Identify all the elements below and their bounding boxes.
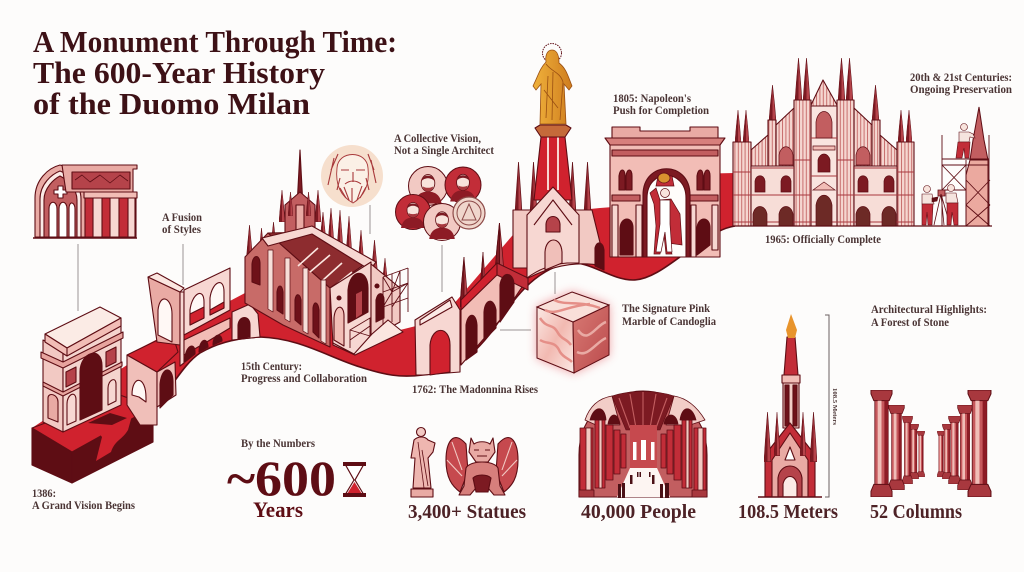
worker left [922, 186, 938, 225]
spire base line [758, 496, 822, 498]
nave floor [617, 468, 670, 497]
nave people [618, 472, 669, 498]
label: forest of stone [871, 302, 987, 329]
halo [542, 44, 562, 62]
central spire [285, 150, 315, 240]
scaffolding [350, 268, 408, 348]
label: 1386 [32, 486, 135, 512]
Napoleon figure [650, 173, 682, 254]
icon: statue [411, 428, 435, 497]
height measure [825, 315, 838, 497]
label: Napoleon: 1805: Napoleon's [613, 91, 691, 105]
orange statue [786, 314, 797, 338]
triumphal arch 1386 [41, 307, 123, 432]
label: 1386: A Grand Vision Begins [32, 498, 135, 512]
icon: columns [871, 390, 991, 497]
icon: hourglass [343, 462, 366, 497]
fusion of styles arcade [127, 268, 260, 425]
label: 1965: 1965: Officially Complete [765, 232, 882, 246]
label: forest of stone: Architectural Highlights: [871, 302, 987, 316]
label: 1386: 1386: [32, 486, 56, 500]
pedestal [535, 125, 571, 137]
front section [330, 262, 371, 355]
label: preservation: Ongoing Preservation [910, 82, 1012, 96]
label: marble [622, 301, 716, 328]
label: 15th century: Progress and Collaboration [241, 371, 367, 385]
icon: gothic window and colonnade [33, 165, 137, 238]
label: A Fusion of Styles: A Fusion [162, 210, 202, 224]
title: A Monument Through Time: [33, 25, 397, 59]
medal [453, 197, 485, 229]
scaffold and workers [922, 107, 990, 226]
facade windows and doors [753, 112, 896, 226]
Duomo facade [733, 58, 914, 226]
left columns [579, 396, 707, 497]
arch top slab [45, 307, 121, 348]
label: 1762: 1762: The Madonnina Rises [412, 382, 538, 396]
height measure: 108.5 Meters [831, 388, 838, 425]
cube left face [537, 307, 574, 373]
label: A Fusion of Styles: of Styles [162, 222, 201, 236]
title: The 600-Year History [33, 56, 325, 90]
facade bands [733, 138, 914, 222]
label: preservation: 20th & 21st Centuries: [910, 70, 1012, 84]
cube glow [537, 292, 609, 373]
label: collective vision: A Collective Vision, [394, 131, 481, 145]
roof pinnacles [246, 190, 388, 288]
nave side windows [252, 256, 319, 338]
marble cube [537, 292, 609, 373]
portrait 2 [445, 167, 481, 203]
title [33, 25, 397, 121]
label: statues: 3,400+ Statues [408, 501, 526, 523]
label: people: 40,000 People [581, 501, 696, 523]
label: forest of stone: A Forest of Stone [871, 315, 950, 329]
Madonnina statue [533, 50, 572, 124]
label: collective vision [394, 131, 494, 157]
label: marble: Marble of Candoglia [622, 314, 716, 328]
nave end wall [630, 425, 657, 468]
icon: nave interior [579, 391, 707, 497]
worker right [946, 184, 958, 225]
label: 15th century: 15th Century: [241, 359, 302, 373]
scaffold [942, 135, 990, 226]
central opening [643, 169, 690, 257]
nave buttresses [268, 250, 326, 344]
icon: Leonardo portrait [321, 145, 383, 207]
1386 base block [32, 395, 153, 483]
label: preservation [910, 70, 1012, 96]
long nave wall [245, 233, 330, 347]
cube right face [573, 305, 609, 373]
label: collective vision: Not a Single Architect [394, 143, 494, 157]
label: by the numbers: By the Numbers [241, 436, 315, 450]
label: Napoleon [613, 91, 709, 117]
Napoleon triumphal arch [605, 127, 725, 257]
1762 left buildings [415, 223, 528, 375]
label: A Fusion of Styles [162, 210, 202, 236]
timeline ribbon [32, 173, 735, 452]
title: of the Duomo Milan [33, 87, 310, 121]
stat: 600 years: ~600 [227, 450, 336, 506]
base line [733, 225, 992, 227]
stat: 600 years: Years [253, 497, 303, 522]
tripod [934, 190, 950, 225]
portraits cluster [396, 166, 485, 240]
portrait 1 [408, 166, 448, 206]
icon: gargoyle [446, 438, 518, 495]
cathedral under construction [245, 150, 408, 355]
spire under repair [970, 107, 988, 160]
icon: spire height [758, 314, 822, 497]
arch opening [80, 353, 102, 420]
connector lines [78, 205, 555, 330]
portrait 3 [396, 194, 430, 230]
label: 15th century [241, 359, 367, 385]
worker top [956, 124, 975, 158]
ribbon lower edge [153, 226, 735, 407]
nave vault [612, 392, 674, 430]
label: meters: 108.5 Meters [738, 501, 838, 523]
label: marble: The Signature Pink [622, 301, 710, 315]
facade spires [735, 58, 912, 142]
Madonnina spire and gothic body [513, 44, 604, 278]
label: columns: 52 Columns [870, 501, 962, 523]
cube top face [537, 292, 609, 322]
label: Napoleon: Push for Completion [613, 103, 709, 117]
cathedral floor slab [333, 320, 403, 355]
portrait 4 [424, 204, 460, 240]
